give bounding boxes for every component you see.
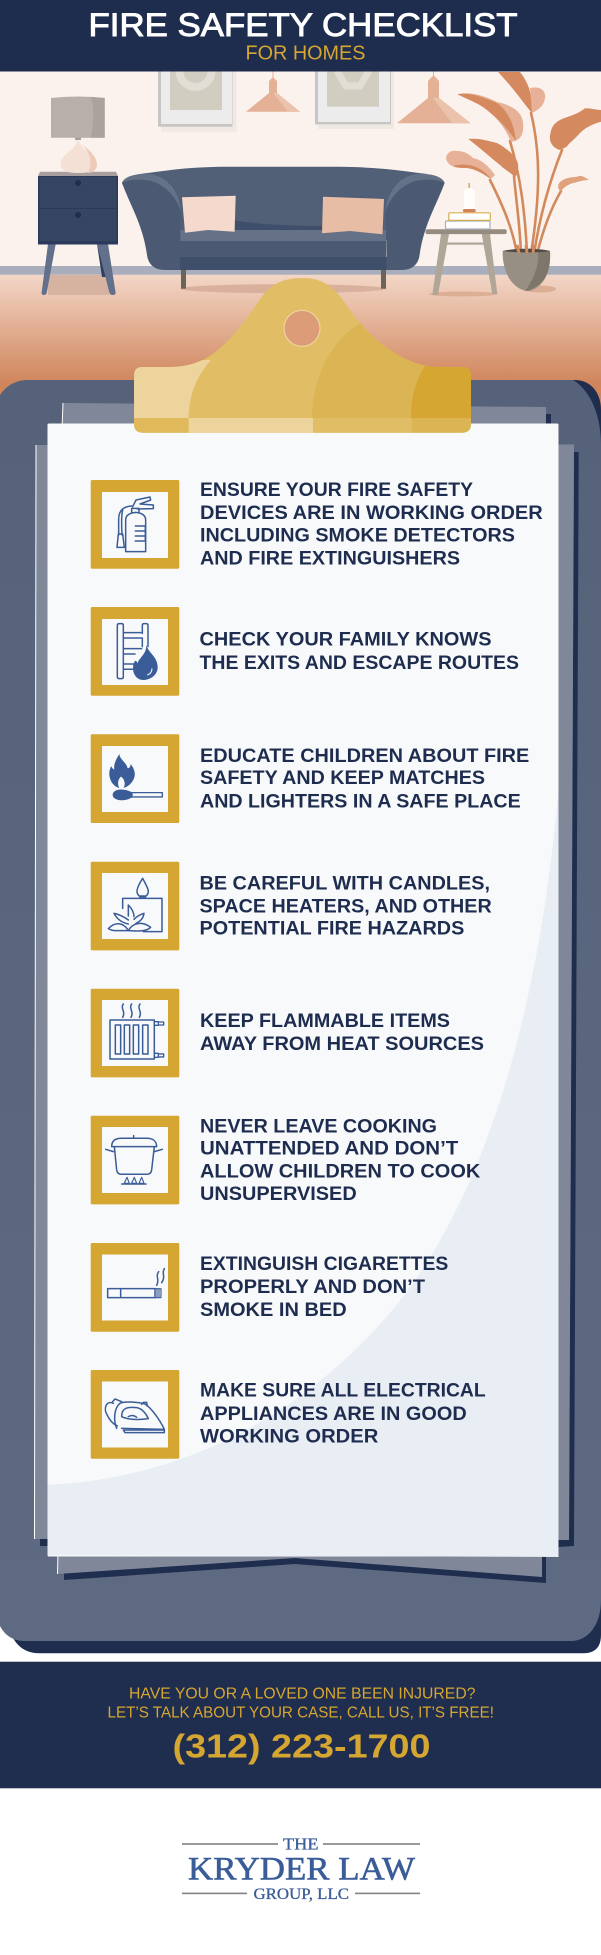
- item 6: never leave cooking: ALLOW CHILDREN TO COOK: [200, 1160, 480, 1182]
- top paper: [48, 424, 558, 1557]
- item 1: fire safety devices: ENSURE YOUR FIRE SAFETY: [200, 479, 473, 501]
- call to action band: LET’S TALK ABOUT YOUR CASE, CALL US, IT’S FREE!: [108, 1704, 494, 1721]
- law firm logo: [182, 1834, 420, 1903]
- item 7: extinguish cigarettes: [91, 1243, 448, 1332]
- item 6: never leave cooking: NEVER LEAVE COOKING: [200, 1115, 437, 1137]
- clipboard clip: [134, 278, 471, 433]
- item 8: electrical appliances: APPLIANCES ARE IN GOOD: [200, 1403, 467, 1425]
- icon box: [91, 1370, 179, 1459]
- back grey sheet wide: [34, 444, 574, 1540]
- item 4: candles and heaters: [91, 862, 492, 950]
- pendant lamp right: [397, 71, 471, 123]
- icon box: [91, 734, 179, 823]
- icon: radiator: [110, 1004, 164, 1059]
- law firm logo: THE: [283, 1834, 318, 1853]
- potted plant: [446, 72, 601, 292]
- item 7: extinguish cigarettes: PROPERLY AND DON’T: [200, 1276, 425, 1298]
- item 4: candles and heaters: POTENTIAL FIRE HAZARDS: [200, 918, 464, 940]
- law firm logo: KRYDER LAW: [188, 1851, 416, 1887]
- subtitle: FOR HOMES: [246, 42, 366, 64]
- room scene: [0, 55, 601, 425]
- icon: ladder and flame: [117, 624, 158, 680]
- icon box: [91, 607, 179, 696]
- item 3: educate children: [91, 734, 529, 823]
- item 6: never leave cooking: UNATTENDED AND DON’T: [200, 1137, 458, 1159]
- icon: cigarette: [108, 1269, 164, 1298]
- item 8: electrical appliances: [91, 1370, 486, 1459]
- item 1: fire safety devices: AND FIRE EXTINGUISHERS: [200, 547, 460, 569]
- icon: cooking pot: [106, 1136, 162, 1184]
- item 3: educate children: SAFETY AND KEEP MATCHES: [200, 767, 485, 789]
- title banner: [0, 0, 601, 72]
- call to action band: [0, 1662, 601, 1788]
- icon: clothes iron: [105, 1399, 164, 1433]
- icon: candle and flower: [108, 878, 162, 932]
- law firm logo: GROUP, LLC: [254, 1886, 349, 1903]
- wall frame left: [158, 55, 236, 132]
- item 1: fire safety devices: INCLUDING SMOKE DETECTORS: [200, 525, 515, 547]
- icon: extinguisher: [117, 497, 153, 552]
- item 5: flammable items: AWAY FROM HEAT SOURCES: [200, 1033, 484, 1055]
- side table with books and candle: [426, 183, 507, 296]
- item 3: educate children: AND LIGHTERS IN A SAFE PLACE: [200, 790, 521, 812]
- clipboard board: [0, 380, 601, 1653]
- item 1: fire safety devices: DEVICES ARE IN WORKING ORDER: [200, 502, 543, 524]
- item 7: extinguish cigarettes: EXTINGUISH CIGARETTES: [200, 1253, 448, 1275]
- icon: match and flame: [109, 754, 162, 800]
- sofa: [122, 167, 445, 293]
- item 2: exits and escape routes: THE EXITS AND ESCAPE ROUTES: [200, 652, 519, 674]
- item 5: flammable items: [91, 989, 484, 1077]
- item 4: candles and heaters: BE CAREFUL WITH CANDLES,: [200, 872, 490, 894]
- call to action band: HAVE YOU OR A LOVED ONE BEEN INJURED?: [129, 1685, 476, 1702]
- clip hole: [284, 310, 320, 346]
- icon box: [91, 862, 179, 950]
- item 8: electrical appliances: WORKING ORDER: [200, 1426, 378, 1448]
- item 7: extinguish cigarettes: SMOKE IN BED: [200, 1299, 347, 1321]
- wall frame right: [315, 71, 394, 129]
- paper stack: [34, 403, 579, 1583]
- icon box: [91, 989, 179, 1077]
- back dark strips: [40, 414, 579, 1583]
- item 2: exits and escape routes: CHECK YOUR FAMILY KNOWS: [200, 629, 492, 651]
- item 6: never leave cooking: UNSUPERVISED: [200, 1183, 357, 1205]
- phone number: (312) 223-1700: [172, 1728, 430, 1765]
- item 1: fire safety devices: [91, 479, 543, 569]
- title: FIRE SAFETY CHECKLIST: [88, 7, 518, 43]
- icon box: [91, 1243, 179, 1332]
- item 3: educate children: EDUCATE CHILDREN ABOUT FIRE: [200, 745, 529, 767]
- pendant lamp left: [246, 71, 300, 112]
- item 2: exits and escape routes: [91, 607, 519, 696]
- item 4: candles and heaters: SPACE HEATERS, AND OTHER: [200, 895, 492, 917]
- item 5: flammable items: KEEP FLAMMABLE ITEMS: [200, 1010, 450, 1032]
- item 6: never leave cooking: [91, 1115, 480, 1205]
- item 8: electrical appliances: MAKE SURE ALL ELECTRICAL: [200, 1380, 486, 1402]
- icon box: [91, 480, 179, 569]
- icon box: [91, 1116, 179, 1204]
- back grey sheet centre: [58, 403, 546, 1577]
- nightstand with table lamp: [38, 96, 118, 295]
